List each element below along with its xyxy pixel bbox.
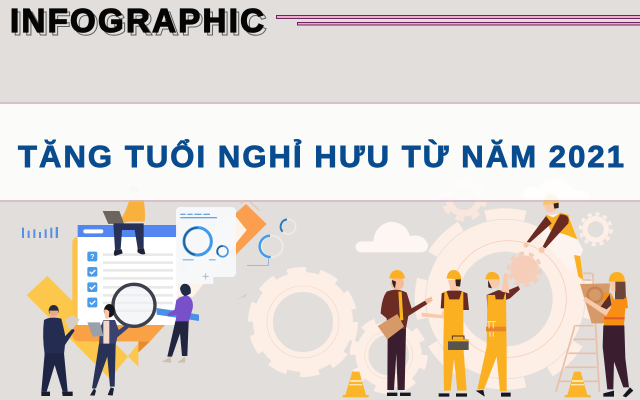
man in navy suit xyxy=(41,305,80,396)
worker with toolbox xyxy=(422,270,469,397)
checklist icons xyxy=(87,252,97,307)
cones xyxy=(343,372,591,397)
illustration: office team and checklist xyxy=(22,186,296,396)
woman holding plan xyxy=(580,272,633,397)
small gear, top xyxy=(443,178,485,219)
infographic wordmark: INFOGRAPHIC xyxy=(10,2,264,39)
illustration: construction team xyxy=(343,178,633,400)
bar icon xyxy=(22,227,58,238)
checklist lines xyxy=(103,253,173,312)
clipboard panel: ? xyxy=(90,254,94,261)
title banner xyxy=(0,102,640,202)
paper plane xyxy=(235,293,247,301)
infographic wordmark: INFOGRAPHIC xyxy=(13,5,267,42)
ladder xyxy=(556,273,599,392)
magnifying glass xyxy=(113,284,199,326)
orange diamond xyxy=(213,204,267,257)
illustration: gear between the two scenes xyxy=(254,273,352,371)
woman with laptop xyxy=(87,304,131,396)
top cloud xyxy=(523,179,591,201)
decorative header rules xyxy=(276,16,640,25)
clipboard panel xyxy=(72,225,178,353)
decorative rings xyxy=(247,219,296,265)
banner heading: TĂNG TUỔI NGHỈ HƯU TỪ NĂM 2021 xyxy=(18,138,624,174)
woman in purple xyxy=(162,284,193,363)
supervisor with clipboard xyxy=(378,270,433,396)
gear held by workers xyxy=(508,253,540,285)
worker on top xyxy=(523,194,583,280)
chart card xyxy=(176,207,236,284)
cloud xyxy=(355,222,428,252)
worker with tool belt xyxy=(476,272,520,397)
small gear, upper right xyxy=(580,214,611,245)
yellow diamond xyxy=(27,276,138,379)
big gear xyxy=(403,196,608,400)
small gear, lower left xyxy=(353,320,424,390)
man with laptop on top xyxy=(103,186,145,256)
orange decorative chevron xyxy=(240,200,259,211)
